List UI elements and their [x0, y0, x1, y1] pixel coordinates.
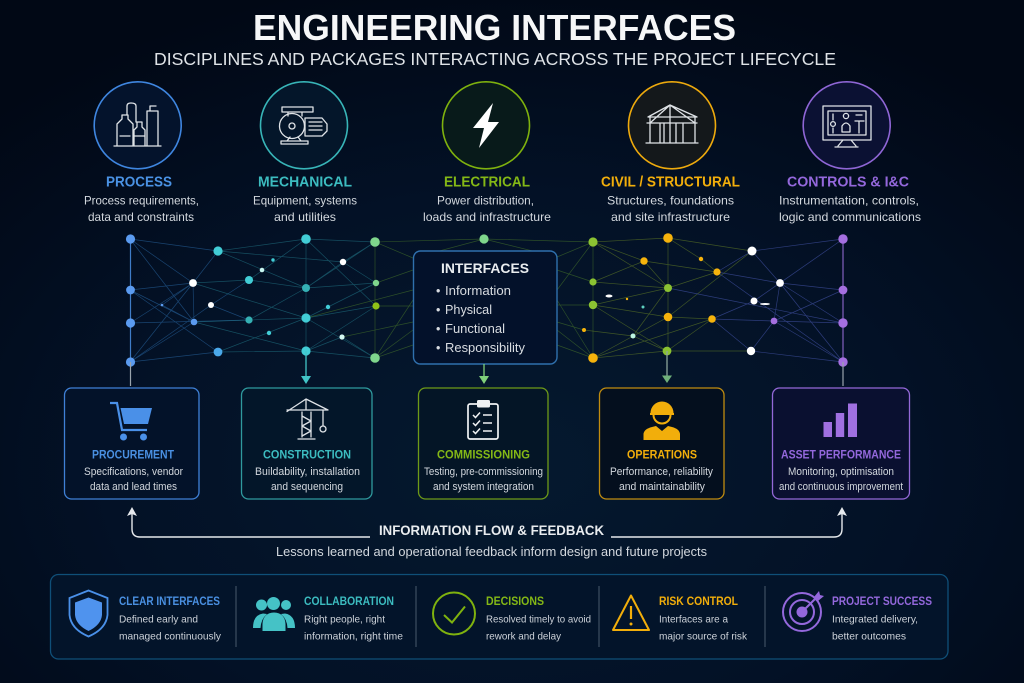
heading: operations: OPERATIONS	[627, 448, 697, 462]
panel: controls discipline	[779, 82, 921, 224]
icon: shield	[70, 590, 108, 636]
panel: civil structural discipline	[601, 82, 740, 224]
description: construction: Buildability, installation	[255, 466, 360, 478]
heading: electrical: ELECTRICAL	[444, 174, 530, 190]
description: asset performance: and continuous improvement	[779, 481, 903, 493]
description: process: data and constraints	[88, 210, 194, 224]
description: clear interfaces: Defined early and	[119, 614, 198, 626]
description: civil structural: Structures, foundations	[607, 194, 734, 208]
factor: risk control	[613, 596, 748, 642]
description: decisions: rework and delay	[486, 630, 562, 642]
heading: mechanical: MECHANICAL	[258, 174, 352, 190]
panel: construction	[242, 388, 372, 499]
icon: control monitor	[803, 82, 890, 169]
description: operations: and maintainability	[619, 481, 705, 493]
heading: clear interfaces: CLEAR INTERFACES	[119, 596, 220, 608]
arrow: controls rail to asset performance	[842, 362, 844, 386]
interfaces heading: INTERFACES	[441, 260, 529, 276]
description: decisions: Resolved timely to avoid	[486, 614, 591, 626]
heading: process: PROCESS	[106, 174, 172, 190]
heading: project success: PROJECT SUCCESS	[832, 596, 932, 608]
arrow: process rail to procurement	[130, 362, 132, 386]
factor: project success	[783, 591, 932, 642]
factor: clear interfaces	[70, 590, 222, 642]
icon: checklist clipboard	[468, 400, 498, 439]
heading: construction: CONSTRUCTION	[263, 448, 351, 462]
factor: decisions	[433, 592, 591, 642]
description: process: Process requirements,	[84, 194, 199, 208]
description: construction: and sequencing	[271, 481, 343, 493]
description: procurement: data and lead times	[90, 481, 177, 493]
panel: electrical discipline	[423, 82, 551, 224]
description: civil structural: and site infrastructure	[611, 210, 730, 224]
interfaces list: Information	[445, 284, 511, 298]
icon: crane hook ball	[320, 426, 326, 432]
panel: interfaces box	[414, 251, 557, 364]
arrow: electrical node to operations	[662, 351, 672, 383]
description: collaboration: information, right time	[304, 630, 403, 642]
interfaces list: Functional	[445, 322, 505, 336]
description: electrical: loads and infrastructure	[423, 210, 551, 224]
right discipline rail	[842, 239, 844, 362]
icon: rising bars	[824, 404, 857, 437]
interfaces list: Physical	[445, 303, 492, 317]
heading: collaboration: COLLABORATION	[304, 596, 394, 608]
heading: procurement: PROCUREMENT	[92, 448, 175, 462]
interfaces list: •	[436, 322, 440, 336]
network of interface links	[126, 233, 848, 367]
description: procurement: Specifications, vendor	[84, 466, 183, 478]
panel: process discipline	[84, 82, 199, 224]
interfaces list: •	[436, 341, 440, 355]
description: electrical: Power distribution,	[437, 194, 534, 208]
description: mechanical: and utilities	[274, 210, 336, 224]
icon: pump and motor	[260, 82, 348, 169]
icon: structural frame	[628, 82, 716, 169]
interfaces list: •	[436, 303, 440, 317]
heading: civil structural: CIVIL / STRUCTURAL	[601, 174, 740, 190]
icon: warning triangle	[613, 596, 649, 630]
network nodes: electrical	[370, 234, 672, 363]
description: operations: Performance, reliability	[610, 466, 713, 478]
description: commissioning: Testing, pre-commissioning	[424, 466, 543, 478]
icon: check circle	[433, 592, 475, 634]
heading: risk control: RISK CONTROL	[659, 596, 738, 608]
panel: success factors	[50, 574, 948, 659]
icon: people group	[253, 597, 295, 631]
panel: mechanical discipline	[253, 82, 357, 224]
feedback heading: INFORMATION FLOW & FEEDBACK	[379, 522, 604, 538]
icon: lightning bolt	[442, 82, 530, 169]
heading: commissioning: COMMISSIONING	[437, 448, 530, 462]
panel: commissioning	[418, 388, 548, 499]
subtitle: DISCIPLINES AND PACKAGES INTERACTING ACROSS THE PROJECT LIFECYCLE	[154, 49, 836, 69]
network nodes: civil and controls	[582, 233, 848, 367]
panel: asset performance	[772, 388, 910, 499]
interfaces list: •	[436, 284, 440, 298]
icon: process vessels	[94, 82, 181, 169]
arrow: interfaces to commissioning	[479, 364, 489, 384]
description: controls: Instrumentation, controls,	[779, 194, 919, 208]
description: project success: Integrated delivery,	[832, 614, 918, 626]
feedback description: Lessons learned and operational feedback inform design and future projects	[276, 545, 707, 559]
description: collaboration: Right people, right	[304, 614, 385, 626]
description: risk control: major source of risk	[659, 630, 748, 642]
description: commissioning: and system integration	[433, 481, 534, 493]
panel: procurement	[64, 388, 199, 499]
arrow: feedback to asset performance	[611, 507, 847, 537]
factor: collaboration	[253, 596, 403, 642]
icon: target with arrow	[783, 591, 824, 631]
network nodes: process and mechanical	[126, 234, 346, 367]
icon: worker with hard hat	[644, 402, 680, 440]
title: ENGINEERING INTERFACES	[253, 7, 736, 48]
panel: operations	[600, 388, 724, 499]
heading: controls: CONTROLS & I&C	[787, 174, 910, 190]
description: project success: better outcomes	[832, 630, 906, 642]
heading: decisions: DECISIONS	[486, 596, 544, 608]
description: asset performance: Monitoring, optimisation	[788, 466, 894, 478]
description: mechanical: Equipment, systems	[253, 194, 357, 208]
arrow: feedback to procurement	[127, 507, 370, 537]
left discipline rail	[130, 239, 132, 362]
interfaces list: Responsibility	[445, 341, 526, 355]
description: controls: logic and communications	[779, 210, 921, 224]
icon: tower crane	[287, 399, 328, 439]
icon: shopping cart	[110, 403, 152, 440]
description: clear interfaces: managed continuously	[119, 630, 222, 642]
heading: asset performance: ASSET PERFORMANCE	[781, 448, 901, 462]
description: risk control: Interfaces are a	[659, 614, 728, 626]
arrow: mechanical to construction	[301, 351, 311, 384]
